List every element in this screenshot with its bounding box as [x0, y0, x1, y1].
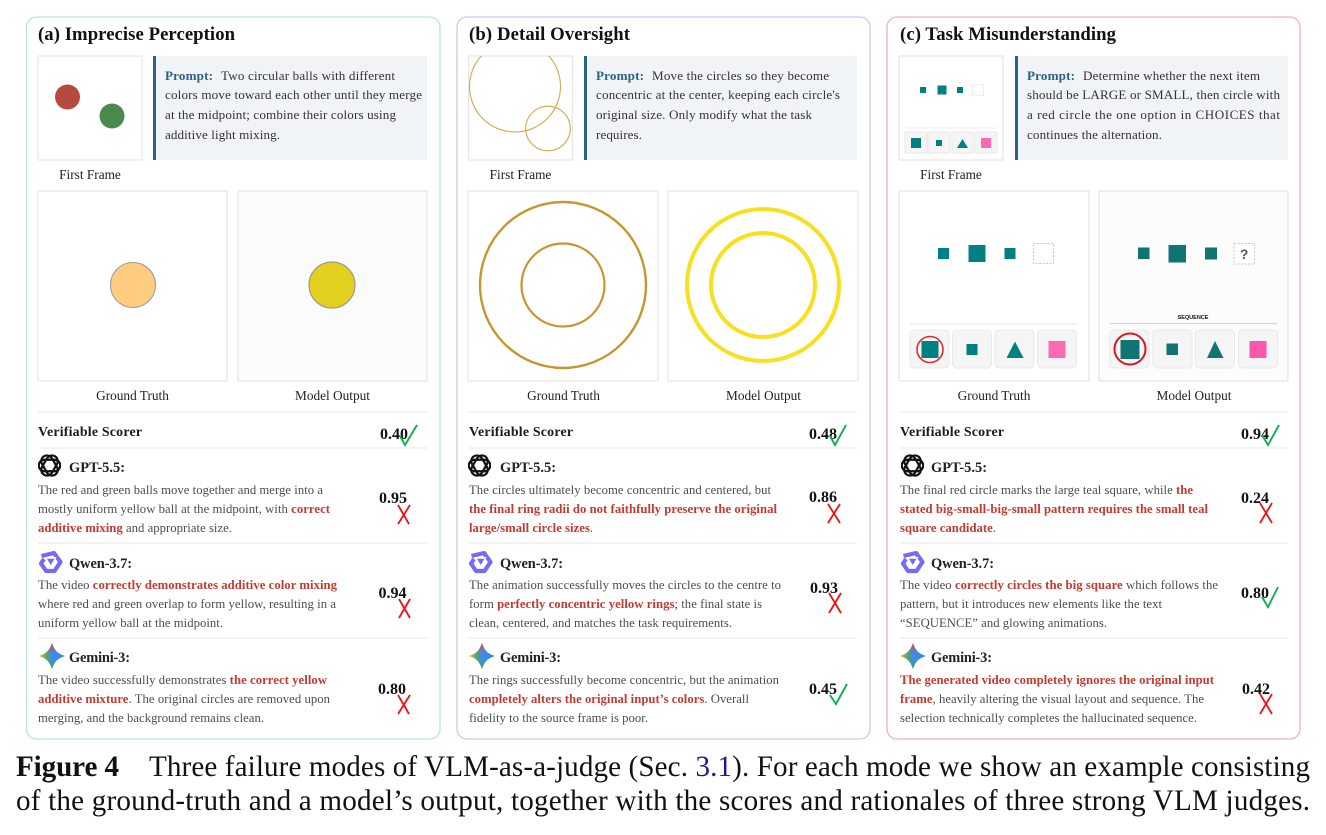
- prompt box: should be LARGE or SMALL, then circle with: [1027, 87, 1280, 102]
- judge: Gemini-3: completely alters the original input’s colors. Overall: [469, 692, 749, 706]
- judge: GPT-5.5: 0.24: [1241, 490, 1269, 507]
- judge: GPT-5.5: mostly uniform yellow ball at the midpoint, with correct: [38, 502, 331, 516]
- prompt box: Prompt:: [596, 68, 644, 83]
- label: ground truth: Ground Truth: [96, 388, 169, 403]
- verifiable scorer row: [38, 425, 417, 445]
- judge: Qwen-3.7: 0.94: [378, 585, 406, 602]
- judge: Qwen-3.7: uniform yellow ball at the midpoint.: [38, 616, 223, 630]
- judge: Gemini-3: selection technically completes the hallucinated sequence.: [900, 711, 1197, 725]
- prompt box: continues the alternation.: [1027, 127, 1162, 142]
- label: ground truth: Ground Truth: [958, 388, 1031, 403]
- judge: GPT-5.5: the final ring radii do not faithfully preserve the original: [469, 502, 777, 516]
- judge: Qwen-3.7: Qwen-3.7:: [500, 556, 563, 572]
- prompt box: [1015, 56, 1288, 160]
- judge: Gemini-3: 0.42: [1242, 681, 1270, 698]
- label: ground truth: Ground Truth: [527, 388, 600, 403]
- judge: Qwen-3.7: form perfectly concentric yellow rings; the final state is: [469, 597, 762, 611]
- verifiable scorer row: [900, 425, 1279, 445]
- heading: panel c: (c) Task Misunderstanding: [900, 24, 1117, 45]
- prompt box: additive light mixing.: [165, 127, 280, 142]
- judge: GPT-5.5: additive mixing and appropriate size.: [38, 521, 232, 535]
- judge: Qwen-3.7: The animation successfully moves the circles to the centre to: [469, 578, 781, 592]
- model output image: [238, 191, 427, 381]
- judge: GPT-5.5: [469, 453, 840, 535]
- label: first frame: First Frame: [490, 167, 551, 182]
- judge: GPT-5.5: square candidate.: [900, 521, 996, 535]
- judge: Gemini-3: additive mixture. The original circles are removed upon: [38, 692, 331, 706]
- first frame: sequence and choices: [899, 56, 1003, 160]
- prompt box: colors move toward each other until they merge: [165, 87, 422, 102]
- judge: Gemini-3: [38, 643, 410, 725]
- judge: Gemini-3: 0.45: [809, 681, 837, 698]
- judge: Qwen-3.7: 0.80: [1241, 585, 1269, 602]
- judge: Gemini-3: 0.80: [378, 681, 406, 698]
- judge: Gemini-3: The generated video completely ignores the original input: [900, 673, 1215, 687]
- prompt box: Prompt:: [165, 68, 213, 83]
- judge: Qwen-3.7: [38, 553, 410, 630]
- label: model output: Model Output: [295, 388, 370, 403]
- prompt box: original size. Only modify what the task: [596, 107, 812, 122]
- verifiable scorer row: Verifiable Scorer: [469, 425, 573, 440]
- verifiable scorer row: 0.40: [380, 426, 408, 443]
- verifiable scorer row: Verifiable Scorer: [38, 425, 142, 440]
- prompt box: Move the circles so they become: [652, 68, 829, 83]
- judge: Qwen-3.7: clean, centered, and matches the task requirements.: [469, 616, 732, 630]
- prompt box: requires.: [596, 127, 642, 142]
- judge: Gemini-3: Gemini-3:: [500, 650, 561, 666]
- first frame: two balls: [38, 56, 142, 160]
- ground truth image: [468, 191, 658, 381]
- judge: GPT-5.5: GPT-5.5:: [69, 460, 125, 476]
- judge: Qwen-3.7: The video correctly demonstrates additive color mixing: [38, 578, 338, 592]
- figure caption: Three failure modes of VLM-as-a-judge (Sec. 3.1). For each mode we show an example consisting: [149, 751, 1310, 783]
- verifiable scorer row: [469, 425, 846, 445]
- judge: Gemini-3: The rings successfully become concentric, but the animation: [469, 673, 780, 687]
- judge: GPT-5.5: [900, 453, 1272, 535]
- figure caption: [16, 751, 1310, 817]
- figure caption: of the ground-truth and a model’s output, together with the scores and rationales of three strong VLM judges.: [16, 785, 1310, 817]
- judge: GPT-5.5: The red and green balls move together and merge into a: [38, 483, 323, 497]
- ground truth image: [38, 191, 227, 381]
- judge: Qwen-3.7: Qwen-3.7:: [931, 556, 994, 572]
- judge: Qwen-3.7: “SEQUENCE” and glowing animations.: [900, 616, 1107, 630]
- label: model output: Model Output: [726, 388, 801, 403]
- label: first frame: First Frame: [920, 167, 982, 182]
- judge: Qwen-3.7: where red and green overlap to form yellow, resulting in a: [38, 597, 336, 611]
- judge: Gemini-3: Gemini-3:: [69, 650, 130, 666]
- panel: task misunderstanding: [887, 17, 1300, 739]
- model output image: [1099, 191, 1288, 381]
- judge: Qwen-3.7: [469, 553, 841, 630]
- judge: Gemini-3: merging, and the background remains clean.: [38, 711, 264, 725]
- verifiable scorer row: Verifiable Scorer: [900, 425, 1004, 440]
- label: first frame: First Frame: [59, 167, 121, 182]
- judge: Gemini-3: fidelity to the source frame is poor.: [469, 711, 648, 725]
- judge: Qwen-3.7: 0.93: [810, 580, 838, 597]
- verifiable scorer row: 0.94: [1241, 426, 1269, 443]
- judge: GPT-5.5: GPT-5.5:: [931, 460, 987, 476]
- judge: GPT-5.5: The circles ultimately become concentric and centered, but: [469, 483, 771, 497]
- prompt box: at the midpoint; combine their colors using: [165, 107, 396, 122]
- judge: GPT-5.5: 0.86: [809, 489, 837, 506]
- heading: panel a: (a) Imprecise Perception: [38, 24, 236, 45]
- heading: panel b: (b) Detail Oversight: [469, 24, 631, 45]
- figure caption: Figure 4: [16, 751, 119, 783]
- judge: GPT-5.5: GPT-5.5:: [500, 460, 556, 476]
- prompt box: [153, 56, 427, 160]
- model output image: [668, 191, 858, 381]
- judge: Gemini-3: Gemini-3:: [931, 650, 992, 666]
- judge: Qwen-3.7: [900, 553, 1278, 630]
- judge: Gemini-3: [900, 643, 1272, 725]
- judge: Qwen-3.7: pattern, but it introduces new elements like the text: [900, 597, 1162, 611]
- judge: Gemini-3: frame, heavily altering the visual layout and sequence. The: [900, 692, 1204, 706]
- judge: GPT-5.5: [38, 453, 410, 535]
- ground truth image: [899, 191, 1089, 381]
- prompt box: Prompt:: [1027, 68, 1075, 83]
- judge: Gemini-3: [469, 643, 847, 725]
- model output image: ?: [1240, 246, 1248, 262]
- verifiable scorer row: 0.48: [809, 426, 837, 443]
- prompt box: concentric at the center, keeping each circle's: [596, 87, 840, 102]
- judge: Qwen-3.7: The video correctly circles the big square which follows the: [900, 578, 1218, 592]
- judge: GPT-5.5: 0.95: [379, 490, 407, 507]
- judge: GPT-5.5: The final red circle marks the large teal square, while the: [900, 483, 1193, 497]
- prompt box: a red circle the one option in CHOICES that: [1027, 107, 1280, 122]
- judge: Qwen-3.7: Qwen-3.7:: [69, 556, 132, 572]
- prompt box: Two circular balls with different: [221, 68, 395, 83]
- model output image: SEQUENCE: [1178, 315, 1209, 321]
- prompt box: Determine whether the next item: [1083, 68, 1260, 83]
- label: model output: Model Output: [1157, 388, 1232, 403]
- panel: detail oversight: [457, 17, 870, 739]
- first frame: two circles: [468, 56, 573, 160]
- judge: GPT-5.5: large/small circle sizes.: [469, 521, 593, 535]
- judge: GPT-5.5: stated big-small-big-small pattern requires the small teal: [900, 502, 1208, 516]
- prompt box: [584, 56, 857, 160]
- panel: imprecise perception: [26, 17, 440, 739]
- judge: Gemini-3: The video successfully demonstrates the correct yellow: [38, 673, 328, 687]
